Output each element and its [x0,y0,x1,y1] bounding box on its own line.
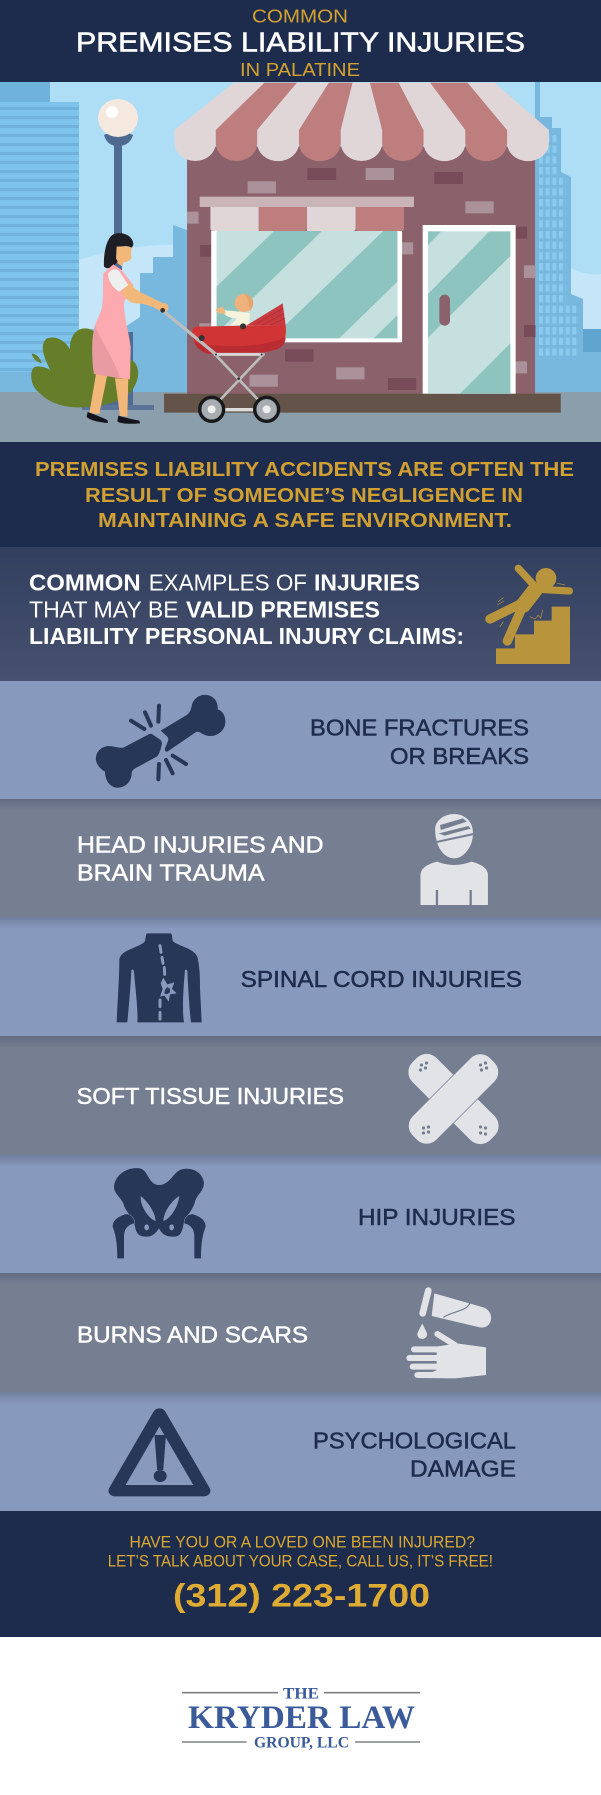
stroller joints [160,308,263,380]
label: BONE FRACTURES [310,715,529,741]
stroller frame [163,311,263,410]
stroller hood [247,303,286,325]
statement text [35,459,574,532]
header panel [0,0,601,82]
heading: in palatine: IN PALATINE [240,59,360,80]
icon: spine [117,933,202,1022]
window awning [200,197,414,231]
legs [89,374,128,417]
label: OR BREAKS [390,743,529,769]
bush [31,328,138,407]
label: BRAIN TRAUMA [77,860,265,886]
logo: kryder law: KRYDER LAW [188,1700,415,1736]
statement text: RESULT OF SOMEONE’S NEGLIGENCE IN [85,485,523,507]
examples text [29,570,464,649]
examples text: COMMON [29,570,141,596]
label: HEAD INJURIES AND [77,832,324,858]
label: DAMAGE [410,1456,516,1482]
logo rules [182,1693,420,1742]
icon: broken bone [96,695,225,788]
step [164,394,561,413]
examples panel [0,547,601,681]
row: soft tissue [0,1036,601,1155]
woman with stroller [87,233,286,424]
logo [182,1686,420,1752]
call to action text: HAVE YOU OR A LOVED ONE BEEN INJURED? [130,1533,475,1551]
dress [92,264,133,379]
phone number: (312) 223-1700 [173,1578,430,1614]
call to action text: LET’S TALK ABOUT YOUR CASE, CALL US, IT’S FREE! [108,1552,493,1570]
row: spinal cord [0,917,601,1036]
icon: falling on stairs [490,568,570,664]
label: HIP INJURIES [358,1204,516,1230]
right tower [535,82,601,392]
sleeve [108,269,128,292]
hero illustration [0,82,601,442]
title: PREMISES LIABILITY INJURIES [76,27,525,58]
bricks [200,168,535,390]
logo: group llc: GROUP, LLC [254,1735,349,1752]
light bricks [187,168,535,387]
stepped building [0,225,187,392]
row: hip injuries [0,1155,601,1273]
door [423,225,516,394]
store [164,83,561,413]
examples text: THAT MAY BE [29,597,179,623]
label [77,832,324,886]
heading: common: COMMON [252,6,348,27]
call to action text [108,1533,493,1570]
hair [104,233,133,268]
label [310,715,529,769]
label: PSYCHOLOGICAL [313,1428,516,1454]
arm [122,282,168,312]
call to action panel [0,1511,601,1637]
label: SPINAL CORD INJURIES [241,966,522,992]
icon: pelvis [113,1168,206,1258]
statement text: PREMISES LIABILITY ACCIDENTS ARE OFTEN THE [35,459,574,481]
row: head injuries [0,799,601,917]
icon: bandaged head [420,814,488,905]
examples text: INJURIES [314,570,420,596]
face [113,246,132,267]
baby [215,294,253,326]
examples text: LIABILITY PERSONAL INJURY CLAIMS: [29,623,464,649]
row: burns and scars [0,1273,601,1392]
icon: crossed bandages [403,1048,504,1150]
row: psychological damage [0,1392,601,1511]
shoes [87,412,140,424]
clouds [79,245,601,392]
statement text: MAINTAINING A SAFE ENVIRONMENT. [98,510,512,532]
row: bone fractures [0,681,601,799]
wall [187,147,535,394]
examples text: EXAMPLES OF [149,570,307,596]
label [313,1428,516,1482]
ground [0,392,601,442]
left tower [0,82,79,372]
awning [174,83,549,161]
stroller basket [192,325,286,355]
wheels [200,397,279,421]
sky [0,82,601,442]
icon: warning triangle [115,1414,204,1491]
shop window [211,231,402,342]
examples text: VALID PREMISES [186,597,380,623]
label: SOFT TISSUE INJURIES [77,1083,344,1109]
label: BURNS AND SCARS [77,1322,308,1348]
statement panel [0,442,601,547]
logo: the: THE [283,1686,319,1703]
street lamp [82,99,154,410]
icon: chemical burn on hand [409,1291,491,1378]
